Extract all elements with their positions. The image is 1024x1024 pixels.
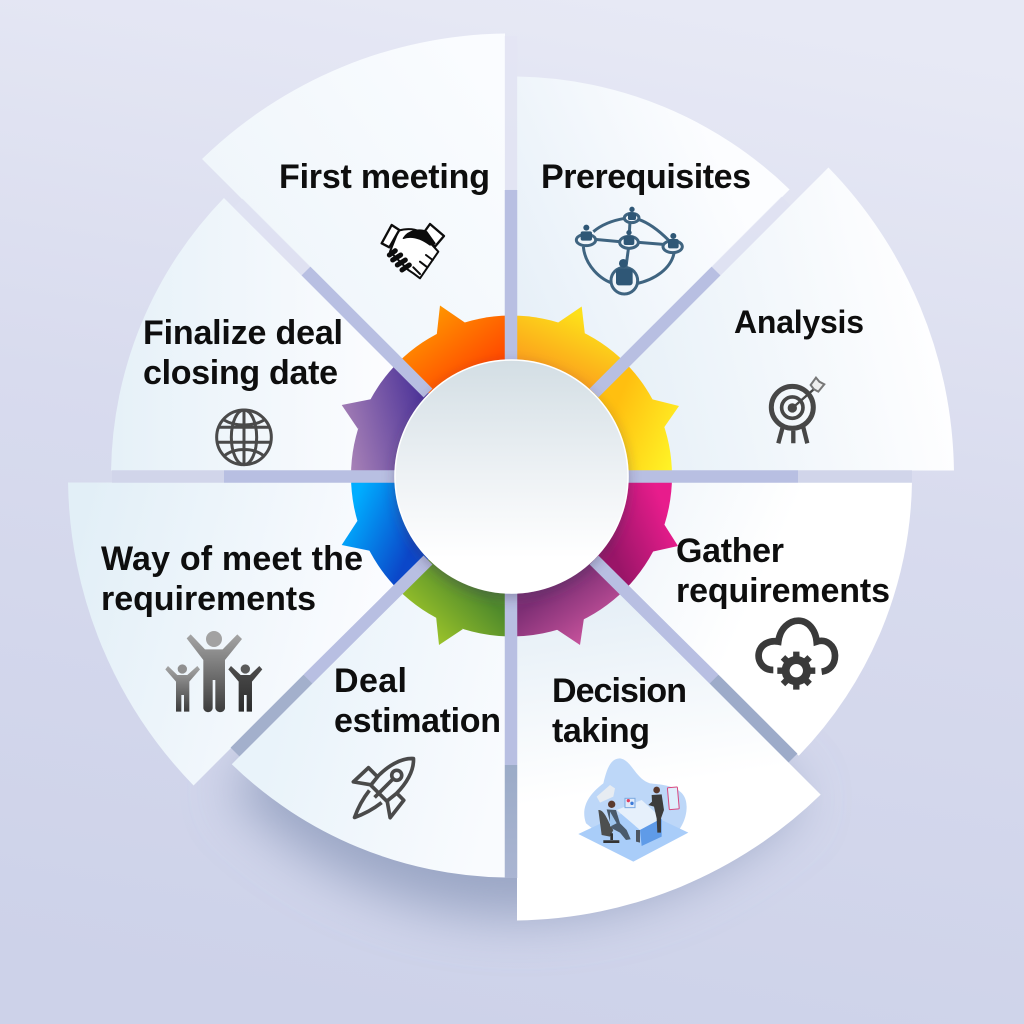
heading: Deal xyxy=(334,662,407,700)
heading: Gather xyxy=(676,532,784,570)
centre circle xyxy=(395,360,628,593)
ring segment: amber xyxy=(512,306,625,476)
heading: Finalize deal xyxy=(143,314,343,352)
icon: network of people xyxy=(576,207,682,294)
heading and icon: finalize deal closing date xyxy=(143,314,343,465)
icon: group of people xyxy=(165,631,262,712)
panel: prerequisites xyxy=(517,76,790,462)
heading: Way of meet the xyxy=(101,540,363,578)
panel: deal estimation xyxy=(232,491,505,877)
panel: first meeting xyxy=(202,34,505,462)
ring segment: plum xyxy=(512,476,625,645)
ring segment: green xyxy=(398,476,512,645)
heading and icon: analysis xyxy=(734,304,864,443)
heading and icon: gather requirements xyxy=(676,532,890,690)
heading and icon: decision taking xyxy=(552,672,688,862)
ring segment: magenta xyxy=(512,476,678,590)
icon: office meeting illustration xyxy=(578,758,688,862)
panel: analysis xyxy=(526,168,954,471)
panel: way of meet the requirements xyxy=(68,482,496,785)
heading and icon: prerequisites xyxy=(541,158,751,294)
ring segment: blue xyxy=(342,476,512,590)
heading: Decision xyxy=(552,672,687,710)
heading line two: requirements xyxy=(101,580,316,618)
wheel panel shapes xyxy=(68,34,954,920)
heading line two: taking xyxy=(552,712,650,750)
icon: handshake xyxy=(382,224,444,278)
heading and icon: way of meet the requirements xyxy=(101,540,363,712)
icon: rocket xyxy=(336,740,431,835)
heading: Prerequisites xyxy=(541,158,751,196)
ring segment: orange xyxy=(398,306,512,476)
icon: cloud with gear xyxy=(759,621,835,690)
icon: globe xyxy=(217,410,271,465)
wheel drop shadow xyxy=(231,510,801,916)
ring segment: yellow xyxy=(512,362,679,476)
heading and icon: first meeting xyxy=(279,158,490,278)
heading: First meeting xyxy=(279,158,490,196)
icon: target with arrow xyxy=(771,378,824,443)
heading line two: requirements xyxy=(676,572,890,610)
panel: decision taking xyxy=(517,491,821,920)
heading line two: estimation xyxy=(334,702,501,740)
ring segment: purple xyxy=(342,362,512,476)
gear ring xyxy=(342,306,679,645)
heading and icon: deal estimation xyxy=(334,662,501,835)
heading line two: closing date xyxy=(143,354,338,392)
heading: Analysis xyxy=(734,304,864,340)
panel: finalize deal closing date xyxy=(111,198,497,470)
panel: gather requirements xyxy=(526,482,912,756)
